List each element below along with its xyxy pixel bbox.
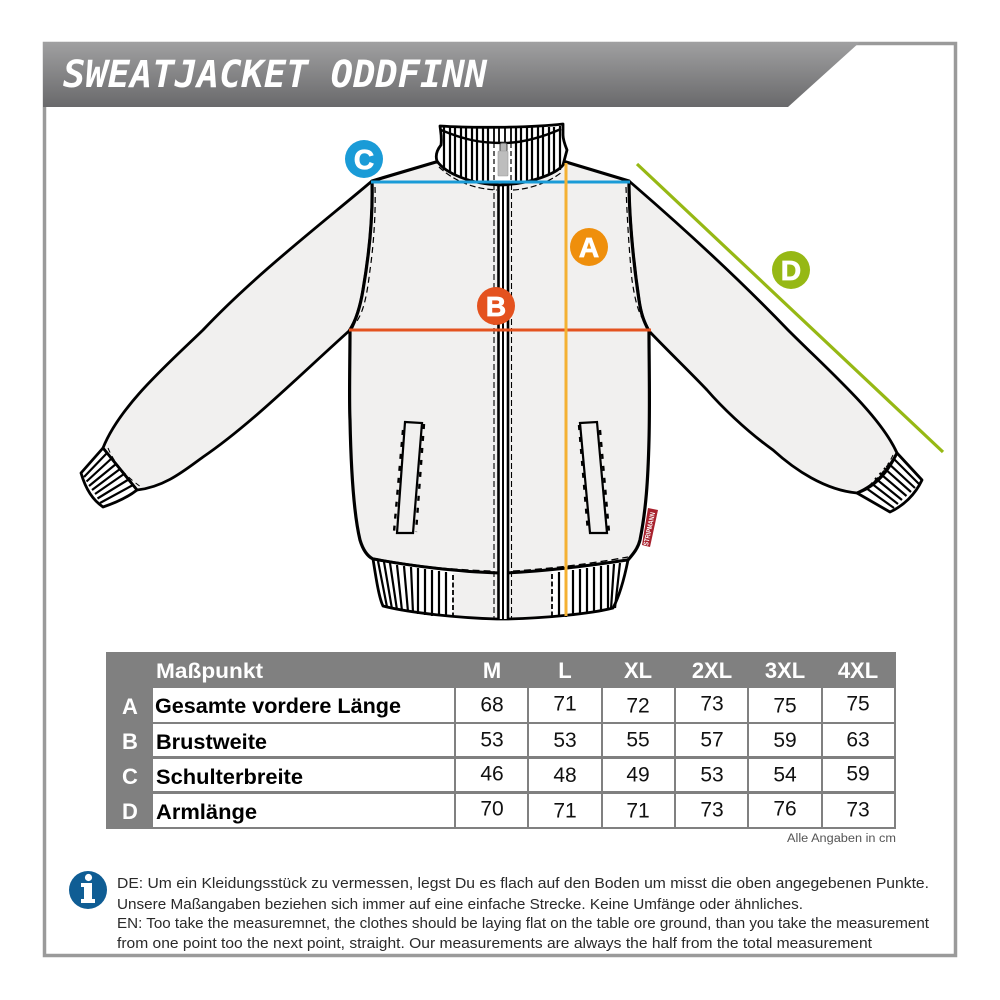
row C: 54 [773, 764, 797, 786]
table header: L [558, 658, 572, 683]
row C: Schulterbreite [156, 766, 303, 789]
badge B: B [486, 291, 506, 322]
row D: 71 [553, 800, 577, 822]
instructions text: EN: Too take the measuremnet, the clothes should be laying flat on the table ore ground, than you take the measurement [117, 916, 929, 932]
right pocket [579, 422, 609, 533]
left cuff [81, 448, 141, 507]
table background [106, 652, 896, 829]
row C: 46 [480, 762, 504, 786]
row D: 70 [480, 798, 504, 820]
table header: M [483, 658, 501, 683]
table header: Maßpunkt [156, 660, 263, 683]
right sleeve [629, 181, 897, 493]
row D: D [122, 799, 138, 824]
row C: C [122, 764, 138, 789]
size table [106, 652, 896, 829]
row D: 71 [626, 800, 650, 822]
row A: 75 [846, 692, 870, 716]
badge D: D [781, 255, 801, 286]
row B: 63 [846, 728, 870, 752]
instructions text: from one point too the next point, straight. Our measurements are always the half from the total measurement [117, 936, 872, 952]
row B: 53 [553, 729, 577, 752]
badge D [772, 251, 810, 289]
row D: Armlänge [156, 801, 257, 824]
icon: info [69, 871, 107, 909]
row B: 59 [773, 729, 797, 752]
badge C: C [354, 144, 374, 175]
zipper [494, 176, 512, 619]
row B: B [122, 729, 138, 754]
badge A [570, 228, 608, 266]
row A: 71 [553, 692, 577, 716]
instructions text: DE: Um ein Kleidungsstück zu vermessen, legst Du es flach auf den Boden um misst die oben angegebenen Punkte. [117, 876, 929, 892]
side seams [357, 187, 644, 321]
jacket illustration [81, 124, 922, 619]
row C: 59 [846, 762, 870, 786]
collar [436, 124, 567, 190]
row C: 49 [626, 764, 650, 786]
table header: XL [624, 658, 652, 683]
row A: Gesamte vordere Länge [155, 695, 401, 718]
left pocket [394, 422, 424, 533]
zipper pull [498, 143, 508, 176]
row A: A [122, 694, 138, 719]
hem rib [373, 559, 628, 619]
row A: 73 [700, 692, 724, 716]
row B: 57 [700, 728, 724, 752]
title banner [43, 42, 860, 107]
row D: 73 [846, 798, 870, 822]
title: SWEATJACKET ODDFINN [63, 53, 488, 96]
row D: 76 [773, 798, 797, 820]
brand tag: STRIPMANN [643, 512, 657, 546]
row C [122, 762, 870, 789]
measure line B [349, 328, 651, 332]
unit note: Alle Angaben in cm [787, 833, 896, 845]
measure line A [564, 163, 568, 616]
measure line D [637, 164, 943, 452]
row D: 73 [700, 798, 724, 822]
row A: 72 [626, 694, 650, 718]
table header [156, 658, 878, 683]
instructions text [117, 876, 929, 952]
row A: 75 [773, 694, 797, 718]
row C: 48 [553, 764, 577, 787]
left sleeve [103, 181, 372, 490]
badge C [345, 140, 383, 178]
table header: 2XL [692, 658, 732, 683]
table header: 4XL [838, 658, 878, 683]
row B: 55 [626, 728, 650, 752]
badge B [477, 287, 515, 325]
row A [122, 692, 870, 719]
instructions text: Unsere Maßangaben beziehen sich immer auf eine einfache Strecke. Keine Umfänge oder ähnliches. [117, 897, 803, 913]
row B [122, 728, 870, 754]
measure line C [371, 180, 630, 184]
row C: 53 [700, 764, 724, 786]
row A: 68 [480, 694, 504, 716]
table cells [153, 688, 894, 827]
row D [122, 798, 870, 824]
row B: 53 [480, 728, 504, 752]
hem stitching [385, 557, 628, 571]
right cuff [857, 453, 922, 512]
row B: Brustweite [156, 731, 267, 754]
body [350, 162, 649, 573]
table header: 3XL [765, 658, 805, 683]
badge A: A [579, 232, 599, 263]
